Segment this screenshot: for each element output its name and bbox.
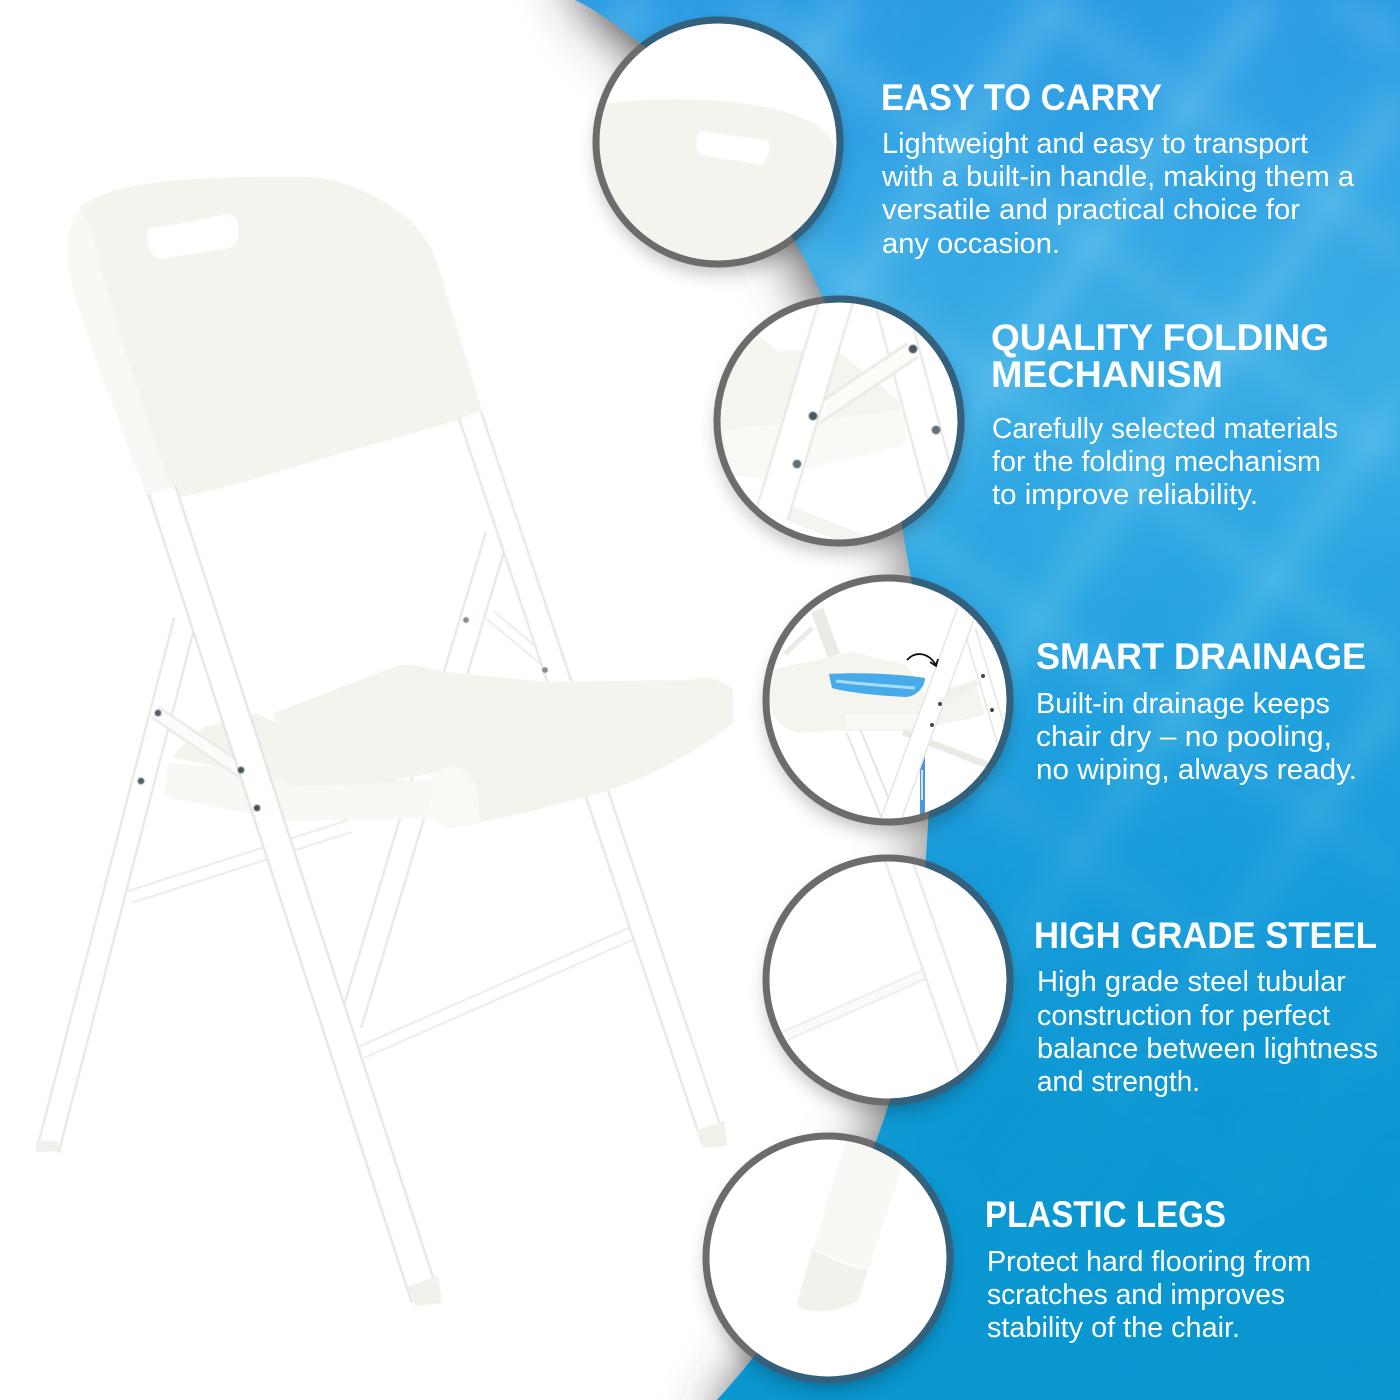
circle: easy to carry detail bbox=[590, 20, 840, 270]
chair rear legs and cross bars bbox=[130, 415, 727, 1148]
handle cutout bbox=[147, 214, 238, 259]
seat close-up bbox=[768, 652, 985, 733]
feature text: easy to carry: versatile and practical choice for bbox=[882, 194, 1300, 226]
plastic cap bbox=[796, 1250, 868, 1311]
chair seat bbox=[164, 665, 733, 828]
feature text: plastic legs: scratches and improves bbox=[987, 1279, 1285, 1311]
feature text: high grade steel: balance between lightness bbox=[1037, 1033, 1378, 1065]
arrow icon bbox=[907, 654, 938, 666]
feature text: plastic legs: PLASTIC LEGS bbox=[985, 1194, 1226, 1235]
feature text: high grade steel: and strength. bbox=[1037, 1066, 1200, 1098]
feature text: plastic legs: Protect hard flooring from bbox=[987, 1246, 1311, 1278]
feature text: high grade steel: construction for perfect bbox=[1037, 1000, 1330, 1032]
blue textured background panel bbox=[575, 0, 1400, 1400]
circle: smart drainage detail bbox=[766, 578, 1010, 822]
feature text: folding mechanism: to improve reliability. bbox=[992, 479, 1258, 511]
chair back rest bbox=[67, 177, 482, 498]
tube bbox=[812, 1135, 905, 1270]
handle opening bbox=[696, 131, 770, 165]
circle: plastic legs detail bbox=[706, 1135, 950, 1380]
feature text: smart drainage: SMART DRAINAGE bbox=[1036, 636, 1366, 677]
feature text: easy to carry: with a built-in handle, making them a bbox=[881, 161, 1355, 193]
feature text: smart drainage: Built-in drainage keeps bbox=[1036, 688, 1330, 720]
feature text: easy to carry: EASY TO CARRY bbox=[881, 77, 1162, 118]
circle: folding mechanism detail bbox=[715, 295, 961, 545]
feature text: folding mechanism bbox=[991, 317, 1338, 511]
feature text: smart drainage: no wiping, always ready. bbox=[1036, 754, 1357, 786]
chair front tubes and links bbox=[36, 490, 548, 1306]
feature text: high grade steel: HIGH GRADE STEEL bbox=[1034, 915, 1377, 956]
water stream bbox=[920, 755, 925, 817]
bolts bbox=[938, 702, 942, 706]
feature text: folding mechanism: MECHANISM bbox=[991, 354, 1223, 395]
chair back close-up bbox=[590, 99, 836, 270]
main tube bbox=[890, 610, 967, 822]
tubes bbox=[890, 300, 945, 505]
feature text: smart drainage: chair dry – no pooling, bbox=[1036, 721, 1332, 753]
feature text: high grade steel: High grade steel tubular bbox=[1037, 966, 1346, 998]
feature text: easy to carry: any occasion. bbox=[882, 228, 1060, 260]
feature text: folding mechanism: QUALITY FOLDING bbox=[991, 317, 1329, 358]
feature text: plastic legs: stability of the chair. bbox=[987, 1312, 1240, 1344]
feature text: easy to carry: Lightweight and easy to transport bbox=[882, 128, 1308, 160]
bolts bbox=[908, 344, 918, 354]
feature text: folding mechanism: Carefully selected materials bbox=[992, 413, 1338, 445]
feature text: high grade steel bbox=[1034, 915, 1378, 1098]
curved edge shadow bbox=[565, 0, 990, 1400]
circle shadows bbox=[596, 30, 1010, 1390]
folding chair illustration bbox=[36, 177, 733, 1306]
feature text: plastic legs bbox=[985, 1194, 1311, 1344]
water pool on seat bbox=[829, 673, 925, 697]
seat close-up bbox=[715, 338, 905, 478]
feature text: easy to carry bbox=[881, 77, 1355, 260]
feature text: smart drainage bbox=[1036, 636, 1366, 786]
feature text: folding mechanism: for the folding mechanism bbox=[992, 446, 1321, 478]
circle: high grade steel detail bbox=[766, 850, 1010, 1102]
